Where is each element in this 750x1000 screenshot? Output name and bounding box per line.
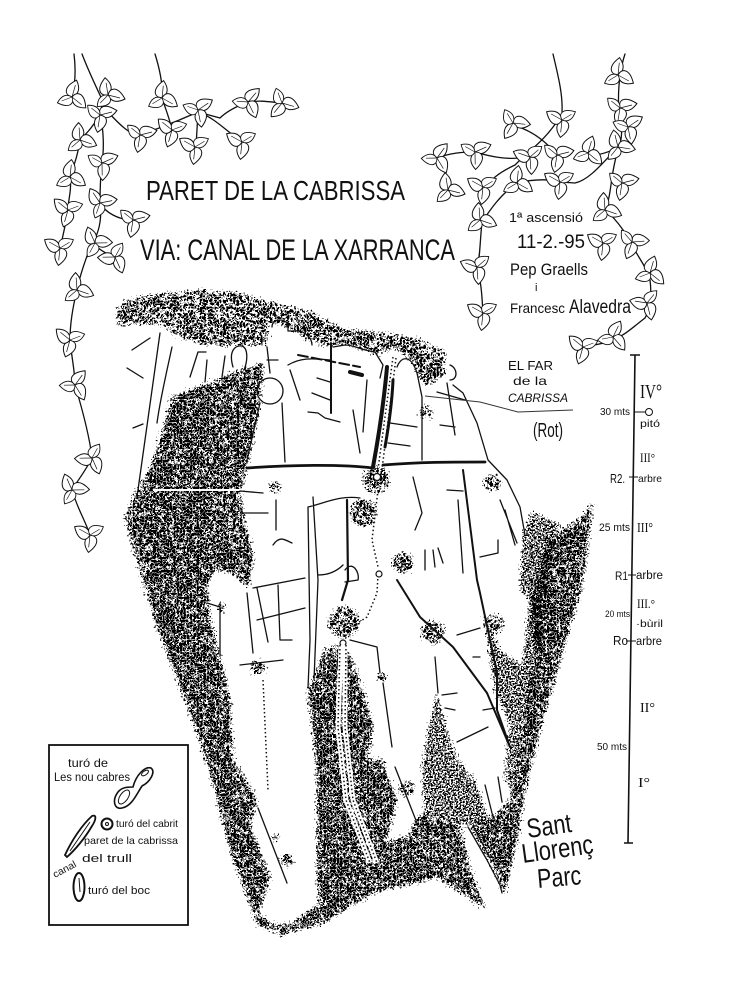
legend frame bbox=[49, 745, 188, 925]
vegetation: right wedge light edge bbox=[483, 512, 560, 790]
illustration: left vine bbox=[42, 54, 302, 553]
legend map box bbox=[49, 745, 188, 925]
leaf clusters bbox=[417, 57, 671, 367]
first ascent credits: 1ª ascensió bbox=[509, 210, 583, 225]
scale labels: 25 mts bbox=[599, 522, 630, 534]
first ascent credits: i bbox=[535, 282, 537, 294]
place label: sant llorenç parc: Parc bbox=[536, 860, 582, 894]
first ascent credits: Alavedra bbox=[569, 297, 631, 318]
scale labels: 20 mts bbox=[605, 609, 630, 620]
vegetation: top ridge bbox=[117, 290, 445, 385]
scale labels: III° bbox=[640, 450, 655, 465]
scale axis bbox=[624, 355, 640, 843]
scale labels: I° bbox=[638, 776, 650, 791]
vertical scale bbox=[597, 355, 663, 843]
vegetation: bottom dark mass bbox=[318, 815, 485, 925]
leaf clusters bbox=[42, 73, 302, 553]
vegetation: dark mass left bbox=[125, 363, 320, 935]
scale labels bbox=[597, 381, 663, 791]
place label: sant llorenç parc: Sant bbox=[525, 808, 574, 844]
scale labels: arbre bbox=[638, 473, 662, 485]
legend: turó de les nou cabres bbox=[54, 756, 153, 808]
legend: turó del boc bbox=[74, 873, 151, 901]
legend: turó de les nou cabres: Les nou cabres bbox=[54, 772, 130, 784]
vine stems bbox=[60, 54, 282, 535]
scale labels: ·bùril bbox=[636, 618, 663, 630]
first ascent credits: Pep Graells bbox=[510, 260, 588, 279]
legend: paret de la cabrissa: paret de la cabrissa bbox=[84, 835, 178, 847]
scale labels: III.° bbox=[637, 596, 655, 611]
scale labels: Ro bbox=[613, 633, 628, 648]
legend: turó del boc: turó del boc bbox=[88, 885, 151, 897]
route name heading: VIA: CANAL DE LA XARRANCA bbox=[140, 234, 455, 267]
legend: canal del trull bbox=[51, 853, 132, 881]
scale labels: R2. bbox=[610, 471, 625, 486]
label: el far de la cabrissa bbox=[508, 358, 568, 442]
label: el far de la cabrissa: de la bbox=[513, 374, 547, 388]
legend: paret de la cabrissa bbox=[65, 816, 178, 857]
illustration: rock wall bbox=[117, 290, 592, 935]
scale labels: arbre bbox=[636, 636, 662, 648]
vegetation: small clusters bbox=[218, 406, 503, 866]
climbing route: dotted line bbox=[263, 357, 396, 863]
first ascent credits bbox=[509, 210, 631, 318]
legend: turó de les nou cabres: turó de bbox=[68, 756, 108, 770]
rock outlines and cracks bbox=[127, 320, 525, 893]
el far leader line bbox=[425, 396, 573, 412]
label: el far de la cabrissa: EL FAR bbox=[508, 358, 553, 373]
vegetation: right dark wedge bbox=[470, 503, 592, 893]
first ascent credits: 11-2.-95 bbox=[517, 232, 585, 253]
label: el far de la cabrissa: CABRISSA bbox=[508, 393, 568, 405]
vine stems bbox=[437, 54, 651, 347]
scale labels: arbre bbox=[636, 570, 663, 582]
legend: canal del trull: canal bbox=[51, 859, 78, 881]
scale labels: R1 bbox=[615, 569, 628, 583]
scale labels: pitó bbox=[640, 419, 661, 430]
vegetation: central dark mass bbox=[308, 643, 397, 905]
thick ledges and lines bbox=[247, 343, 510, 747]
scale labels: II° bbox=[640, 701, 655, 716]
first ascent credits: Francesc bbox=[510, 300, 565, 316]
label: el far de la cabrissa: (Rot) bbox=[533, 420, 563, 442]
legend: turó del cabrit: turó del cabrit bbox=[116, 818, 178, 830]
vegetation: centre lower light slope bbox=[422, 695, 490, 825]
scale labels: IV° bbox=[640, 381, 662, 403]
place label: sant llorenç parc bbox=[520, 808, 595, 894]
illustration: right vine bbox=[417, 54, 671, 367]
legend: canal del trull: del trull bbox=[82, 853, 132, 865]
title: PARET DE LA CABRISSA bbox=[146, 175, 405, 206]
place label: sant llorenç parc: Llorenç bbox=[520, 829, 595, 869]
scale labels: III° bbox=[637, 521, 653, 536]
scale labels: 30 mts bbox=[600, 407, 630, 418]
scale labels: 50 mts bbox=[597, 741, 627, 753]
crack line through vegetation bbox=[153, 489, 242, 491]
